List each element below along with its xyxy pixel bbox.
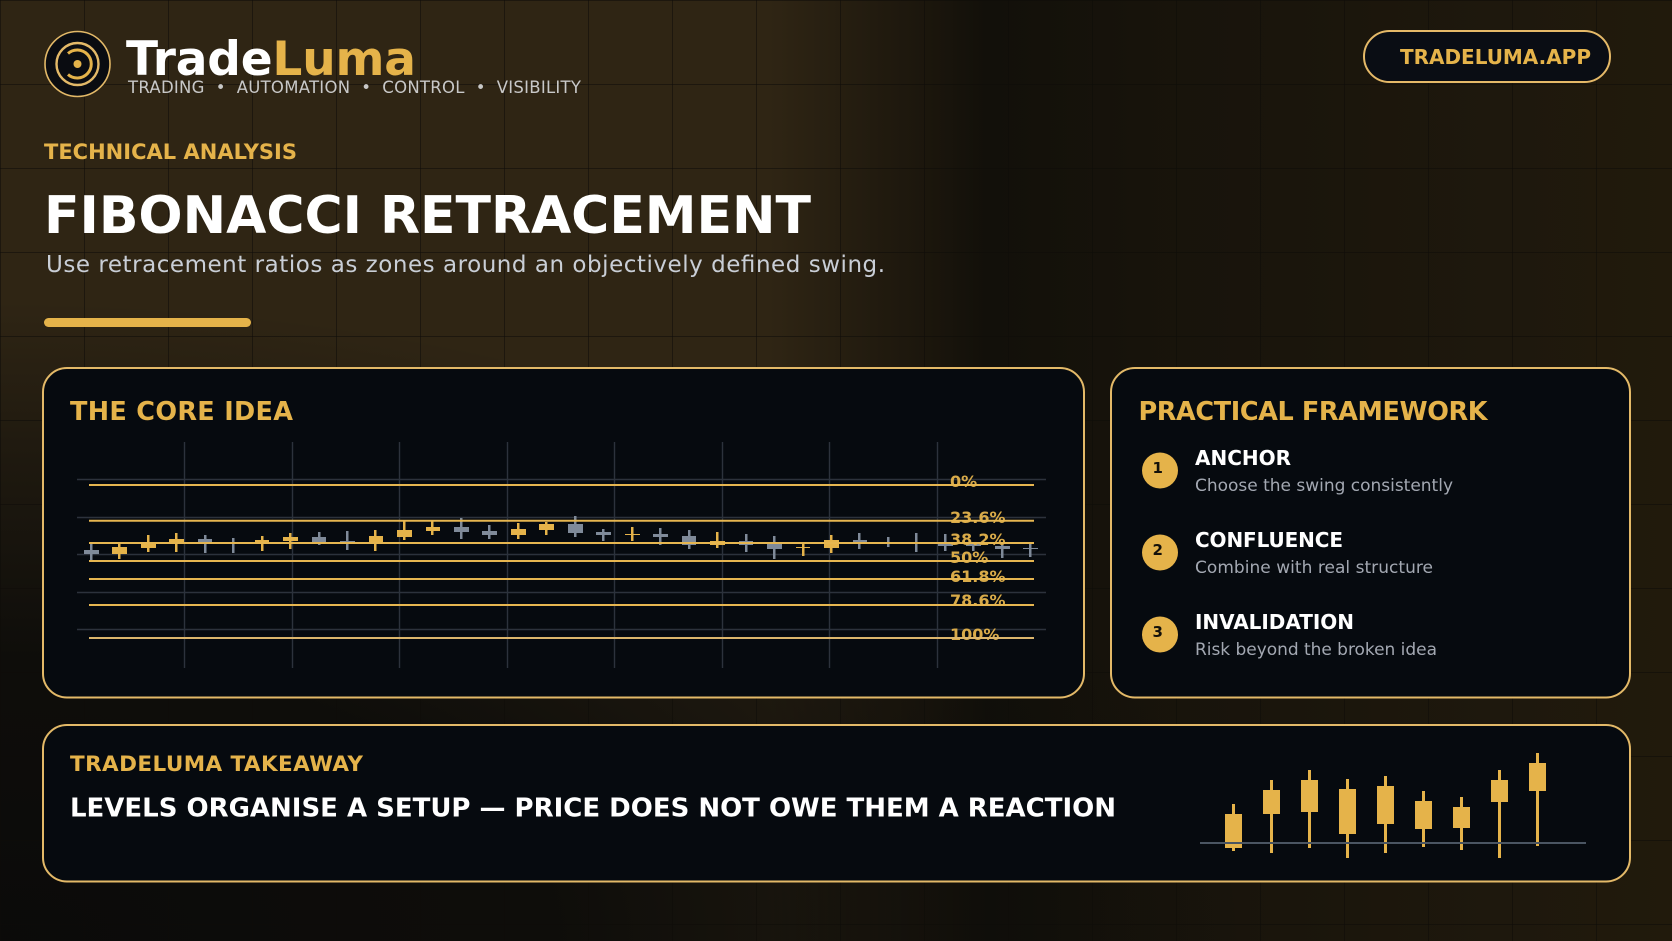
step 1: anchor: ANCHOR bbox=[1195, 446, 1291, 470]
level labels: 61.8% bbox=[950, 567, 1006, 586]
step 2: confluence: 2 bbox=[1152, 541, 1163, 559]
brand tagline: TRADING • AUTOMATION • CONTROL • VISIBILITY bbox=[127, 78, 582, 97]
website pill: TRADELUMA.APP bbox=[1400, 45, 1591, 69]
takeaway label: TRADELUMA TAKEAWAY bbox=[70, 752, 363, 777]
mini candlestick chart bbox=[1200, 753, 1586, 858]
panel heading: PRACTICAL FRAMEWORK bbox=[1138, 397, 1489, 427]
title: FIBONACCI RETRACEMENT bbox=[44, 186, 812, 246]
accent bar bbox=[44, 318, 251, 327]
fibonacci levels bbox=[89, 485, 1034, 638]
step 1: anchor: Choose the swing consistently bbox=[1195, 476, 1453, 496]
step 3: invalidation bbox=[1142, 610, 1437, 660]
website pill bbox=[1364, 31, 1610, 82]
fibonacci chart bbox=[77, 442, 1046, 668]
level labels: 23.6% bbox=[950, 508, 1006, 527]
step 1: anchor: 1 bbox=[1152, 459, 1163, 477]
step 1: anchor bbox=[1142, 446, 1453, 496]
level labels: 0% bbox=[950, 472, 977, 491]
panel: the core idea bbox=[43, 368, 1084, 698]
level labels: 38.2% bbox=[950, 530, 1006, 549]
panel: takeaway bbox=[43, 725, 1630, 882]
step 3: invalidation: Risk beyond the broken idea bbox=[1195, 640, 1437, 660]
step 2: confluence: CONFLUENCE bbox=[1195, 528, 1343, 552]
level labels: 50% bbox=[950, 548, 988, 567]
level labels bbox=[950, 472, 1006, 644]
brand name: TradeLuma bbox=[126, 32, 416, 87]
panel heading: THE CORE IDEA bbox=[70, 397, 293, 427]
step 3: invalidation: INVALIDATION bbox=[1195, 610, 1354, 634]
takeaway message: LEVELS ORGANISE A SETUP — PRICE DOES NOT OWE THEM A REACTION bbox=[70, 794, 1116, 824]
eyebrow: TECHNICAL ANALYSIS bbox=[44, 140, 297, 164]
step 2: confluence: Combine with real structure bbox=[1195, 558, 1433, 578]
logo icon bbox=[45, 32, 110, 96]
panel: practical framework bbox=[1111, 368, 1630, 698]
step 2: confluence bbox=[1142, 528, 1433, 578]
step 3: invalidation: 3 bbox=[1152, 623, 1163, 641]
subtitle: Use retracement ratios as zones around an objectively defined swing. bbox=[46, 252, 885, 278]
candlesticks bbox=[84, 516, 1038, 560]
level labels: 78.6% bbox=[950, 591, 1006, 610]
level labels: 100% bbox=[950, 625, 999, 644]
